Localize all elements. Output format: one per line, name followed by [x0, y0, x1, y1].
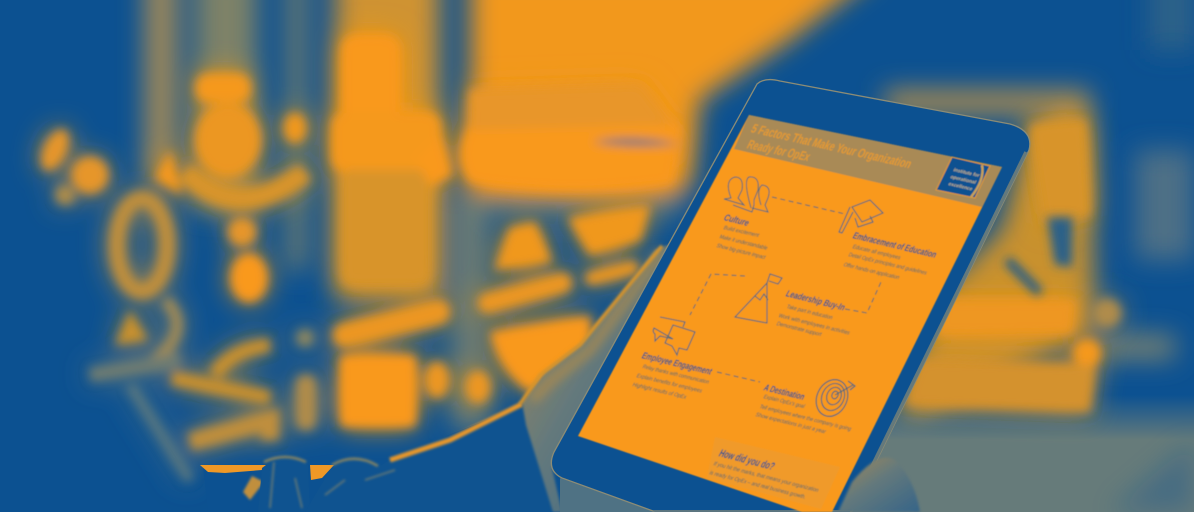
title: Ready for OpEx — [745, 137, 814, 164]
callout: how did you do — [707, 437, 840, 509]
logo: institute for — [952, 167, 981, 179]
screen background — [578, 115, 1002, 512]
title: 5 Factors That Make Your Organization — [749, 121, 915, 171]
panel: culture: Build excitement — [722, 225, 760, 239]
panel: employee engagement: Highlight results of OpEx — [631, 382, 687, 401]
panel: leadership buy-in: Leadership Buy-In — [784, 289, 847, 313]
panel: culture: Show big-picture impact — [715, 243, 767, 261]
panel: embracement of education: Embracement of Education — [851, 231, 939, 261]
left hand — [520, 245, 674, 512]
icon: chat bubbles — [653, 317, 695, 355]
callout: how did you do: If you hit the marks, that means your organization — [712, 461, 820, 494]
panel: leadership buy-in: Demonstrate support — [775, 321, 823, 338]
panel: embracement of education: Offer hands-on application — [842, 262, 900, 281]
panel: a destination: Show expectations in just a year — [754, 412, 827, 435]
tablet screen: infographic — [578, 115, 1002, 512]
header band — [734, 115, 1002, 207]
title — [745, 121, 915, 171]
logo — [936, 157, 990, 198]
orange table strip — [200, 465, 266, 473]
panel: embracement of education: Detail OpEx principles and guidelines — [847, 252, 928, 276]
connector: dashed paths — [690, 197, 881, 382]
panel: a destination: Explain OpEx's goal — [762, 394, 806, 410]
panel: culture: Culture — [722, 213, 752, 229]
left sleeve — [200, 404, 565, 512]
panel: leadership buy-in: Take part in education — [785, 304, 834, 321]
panel: leadership buy-in — [775, 289, 851, 338]
callout: how did you do: How did you do? — [716, 448, 777, 473]
tablet body — [551, 80, 1030, 511]
panel: culture — [715, 213, 769, 261]
panel: embracement of education: Educate all employees — [851, 244, 902, 261]
panel: embracement of education — [842, 231, 939, 281]
logo: excellence — [947, 181, 974, 192]
icon: target — [810, 374, 855, 422]
right hand thumb — [838, 458, 920, 512]
panel: employee engagement: Relay thanks with communication — [641, 364, 710, 386]
icon: mountain with flag — [735, 274, 782, 323]
panel: employee engagement: Employee Engagement — [640, 351, 714, 377]
icon: graduation cap — [839, 200, 883, 233]
callout: how did you do: is ready for OpEx – and real business growth. — [708, 470, 807, 501]
panel: a destination — [754, 383, 852, 435]
panel: culture: Make it understandable — [718, 234, 769, 252]
lower right floor band — [850, 395, 1194, 512]
panel: a destination: A Destination — [762, 383, 807, 403]
panel: leadership buy-in: Work with employees in activities — [777, 313, 851, 336]
panel: employee engagement — [631, 351, 714, 401]
panel: a destination: Tell employees where the company is going — [758, 404, 852, 433]
logo: operational — [949, 174, 978, 186]
icon: people — [724, 177, 769, 212]
panel: employee engagement: Explain benefits for employees — [635, 373, 703, 394]
